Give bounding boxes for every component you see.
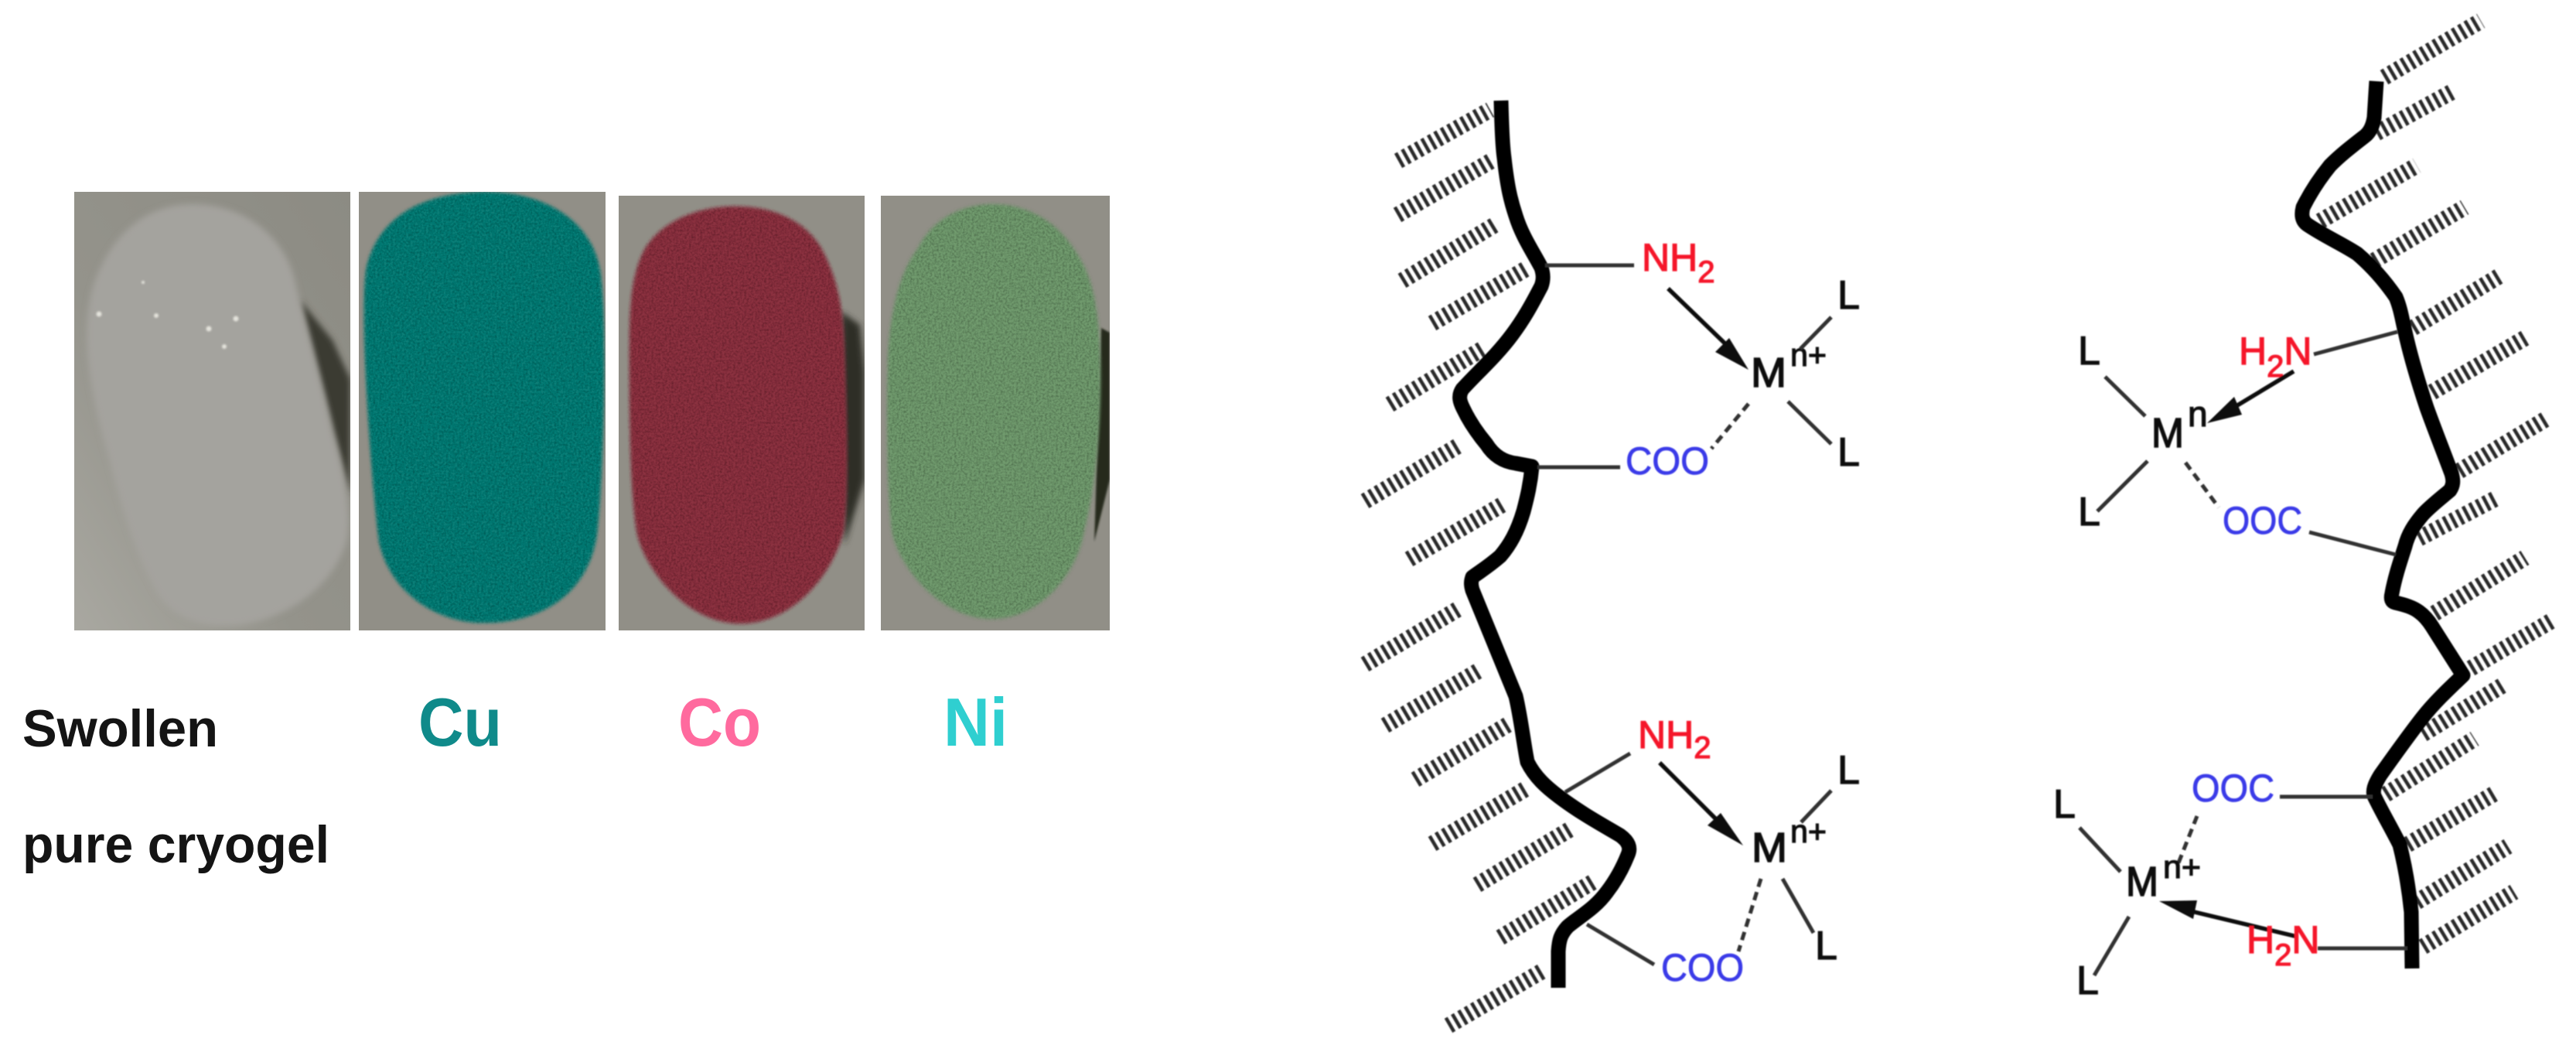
group: lower H2N / OOC complex: H (2247, 918, 2274, 961)
diagram: left chain with metal coordination (1365, 101, 1860, 1026)
group: lower NH2 / COO complex: n+ (1790, 813, 1827, 849)
group: upper NH2 / COO complex: L (1837, 273, 1860, 318)
group: lower H2N / OOC complex: n+ (2163, 849, 2201, 885)
group: upper NH2 / COO complex: L (1837, 430, 1860, 475)
label: Cu: Cu (418, 684, 502, 760)
group: lower NH2 / COO complex: NH (1638, 713, 1694, 757)
group: lower H2N / OOC complex: 2 (2274, 938, 2291, 972)
group: lower NH2 / COO complex (1565, 713, 1860, 989)
polymer backbone: left (1460, 101, 1629, 988)
label: Ni: Ni (943, 684, 1008, 760)
group: lower H2N / OOC complex: M (2126, 859, 2158, 905)
group: lower NH2 / COO complex: COO (1661, 946, 1744, 989)
group: lower NH2 / COO complex: 2 (1694, 731, 1711, 765)
group: upper H2N / OOC complex (2078, 329, 2397, 555)
group: upper H2N / OOC complex: L (2078, 490, 2100, 535)
group: lower H2N / OOC complex: OOC (2192, 767, 2274, 810)
caption: Swollen pure cryogel: Swollen (22, 699, 218, 758)
group: upper H2N / OOC complex: 2 (2267, 350, 2284, 384)
group: upper NH2 / COO complex: M (1751, 350, 1786, 396)
diagram: right chain with metal coordination (2053, 21, 2554, 1003)
photo: Co cryogel (619, 196, 865, 630)
group: lower H2N / OOC complex (2053, 767, 2407, 1003)
group: lower NH2 / COO complex: L (1815, 924, 1837, 968)
group: upper H2N / OOC complex: OOC (2223, 499, 2302, 542)
group: upper H2N / OOC complex: H (2239, 330, 2267, 373)
group: lower H2N / OOC complex: L (2076, 958, 2099, 1003)
hatching: left polymer surface (1365, 110, 1593, 1026)
group: lower H2N / OOC complex: N (2291, 918, 2319, 961)
polymer backbone: right (2302, 81, 2463, 968)
group: upper H2N / OOC complex: M (2151, 410, 2184, 456)
photo: Ni cryogel (881, 196, 1110, 630)
caption: Swollen pure cryogel (22, 699, 329, 874)
group: lower H2N / OOC complex: L (2053, 782, 2076, 827)
group: upper H2N / OOC complex: L (2078, 329, 2100, 374)
hatching: right polymer surface (2320, 21, 2554, 947)
group: upper NH2 / COO complex: NH (1642, 236, 1697, 279)
group: upper NH2 / COO complex: n+ (1790, 336, 1827, 373)
caption: Swollen pure cryogel: pure cryogel (22, 815, 329, 874)
photo panel: four cryogel samples (74, 192, 1110, 630)
photo: pure cryogel (74, 192, 350, 630)
group: upper NH2 / COO complex (1537, 236, 1860, 483)
label: Co: Co (678, 684, 761, 760)
group: upper NH2 / COO complex: COO (1626, 439, 1709, 483)
group: upper H2N / OOC complex: n (2188, 394, 2208, 434)
group: lower NH2 / COO complex: L (1837, 748, 1860, 793)
photo: Cu cryogel (359, 192, 606, 630)
group: upper H2N / OOC complex: N (2284, 330, 2312, 373)
group: lower NH2 / COO complex: M (1752, 825, 1787, 871)
group: upper NH2 / COO complex: 2 (1697, 255, 1714, 289)
